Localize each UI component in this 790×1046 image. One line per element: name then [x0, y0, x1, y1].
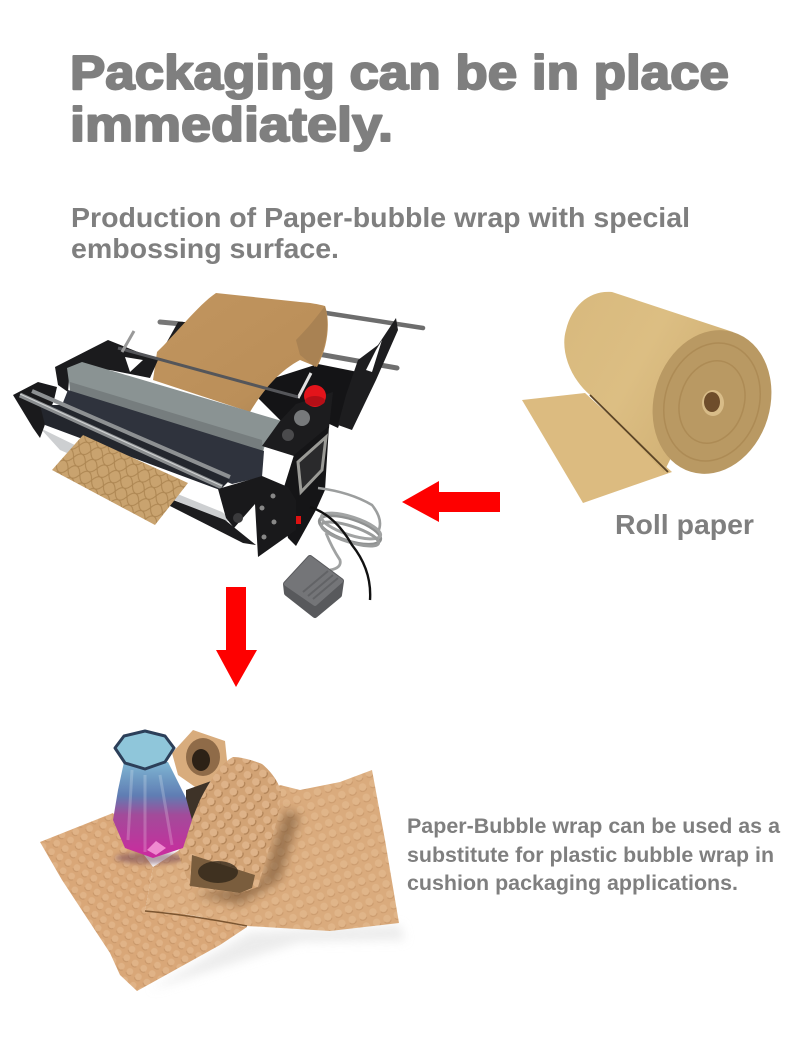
subtitle: embossing surface. — [71, 233, 339, 264]
roll paper image — [522, 292, 789, 503]
arrow: roll paper into machine — [402, 481, 500, 522]
body text: cushion packaging applications. — [407, 872, 738, 895]
body text: substitute for plastic bubble wrap in — [407, 844, 774, 867]
left end black housing — [55, 340, 158, 392]
title — [70, 47, 729, 152]
roll paper body — [564, 292, 733, 472]
small paper curl — [172, 730, 228, 789]
body text — [407, 815, 780, 895]
black tray under rods — [40, 405, 230, 490]
title: Packaging can be in place — [70, 47, 729, 100]
left bubble sheet — [40, 813, 247, 991]
grey cover — [67, 362, 282, 452]
machine rear rods — [160, 313, 423, 368]
arrow: machine to output — [216, 587, 257, 687]
control panel — [262, 373, 333, 546]
front rods — [20, 391, 230, 487]
dark gap behind vase — [186, 775, 228, 825]
title: immediately. — [70, 99, 393, 152]
front right bracket — [218, 476, 301, 557]
machine: paper bubble wrap maker — [13, 293, 423, 615]
rolled bubble wrap — [178, 757, 281, 893]
lower rail — [40, 428, 232, 522]
paper roll on machine — [153, 293, 328, 412]
roll paper sheet — [522, 393, 672, 503]
contact shadows — [195, 810, 300, 905]
foot pedal — [286, 558, 341, 615]
right bubble sheet — [145, 770, 399, 931]
glass vase — [113, 731, 192, 858]
body text: Paper-Bubble wrap can be used as a — [407, 815, 780, 838]
embossed paper output — [52, 435, 188, 525]
cables — [310, 488, 384, 600]
machine rear frame — [158, 318, 398, 430]
dark plate — [60, 390, 264, 484]
roll paper end — [635, 315, 789, 489]
subtitle: Production of Paper-bubble wrap with special — [71, 202, 690, 233]
front thin rod with clamp — [118, 331, 298, 397]
front bracket left — [13, 382, 57, 438]
subtitle — [71, 202, 690, 264]
label: roll paper: Roll paper — [615, 509, 754, 540]
scene shadow — [150, 925, 405, 990]
bubble wrap scene with vase — [40, 730, 405, 991]
